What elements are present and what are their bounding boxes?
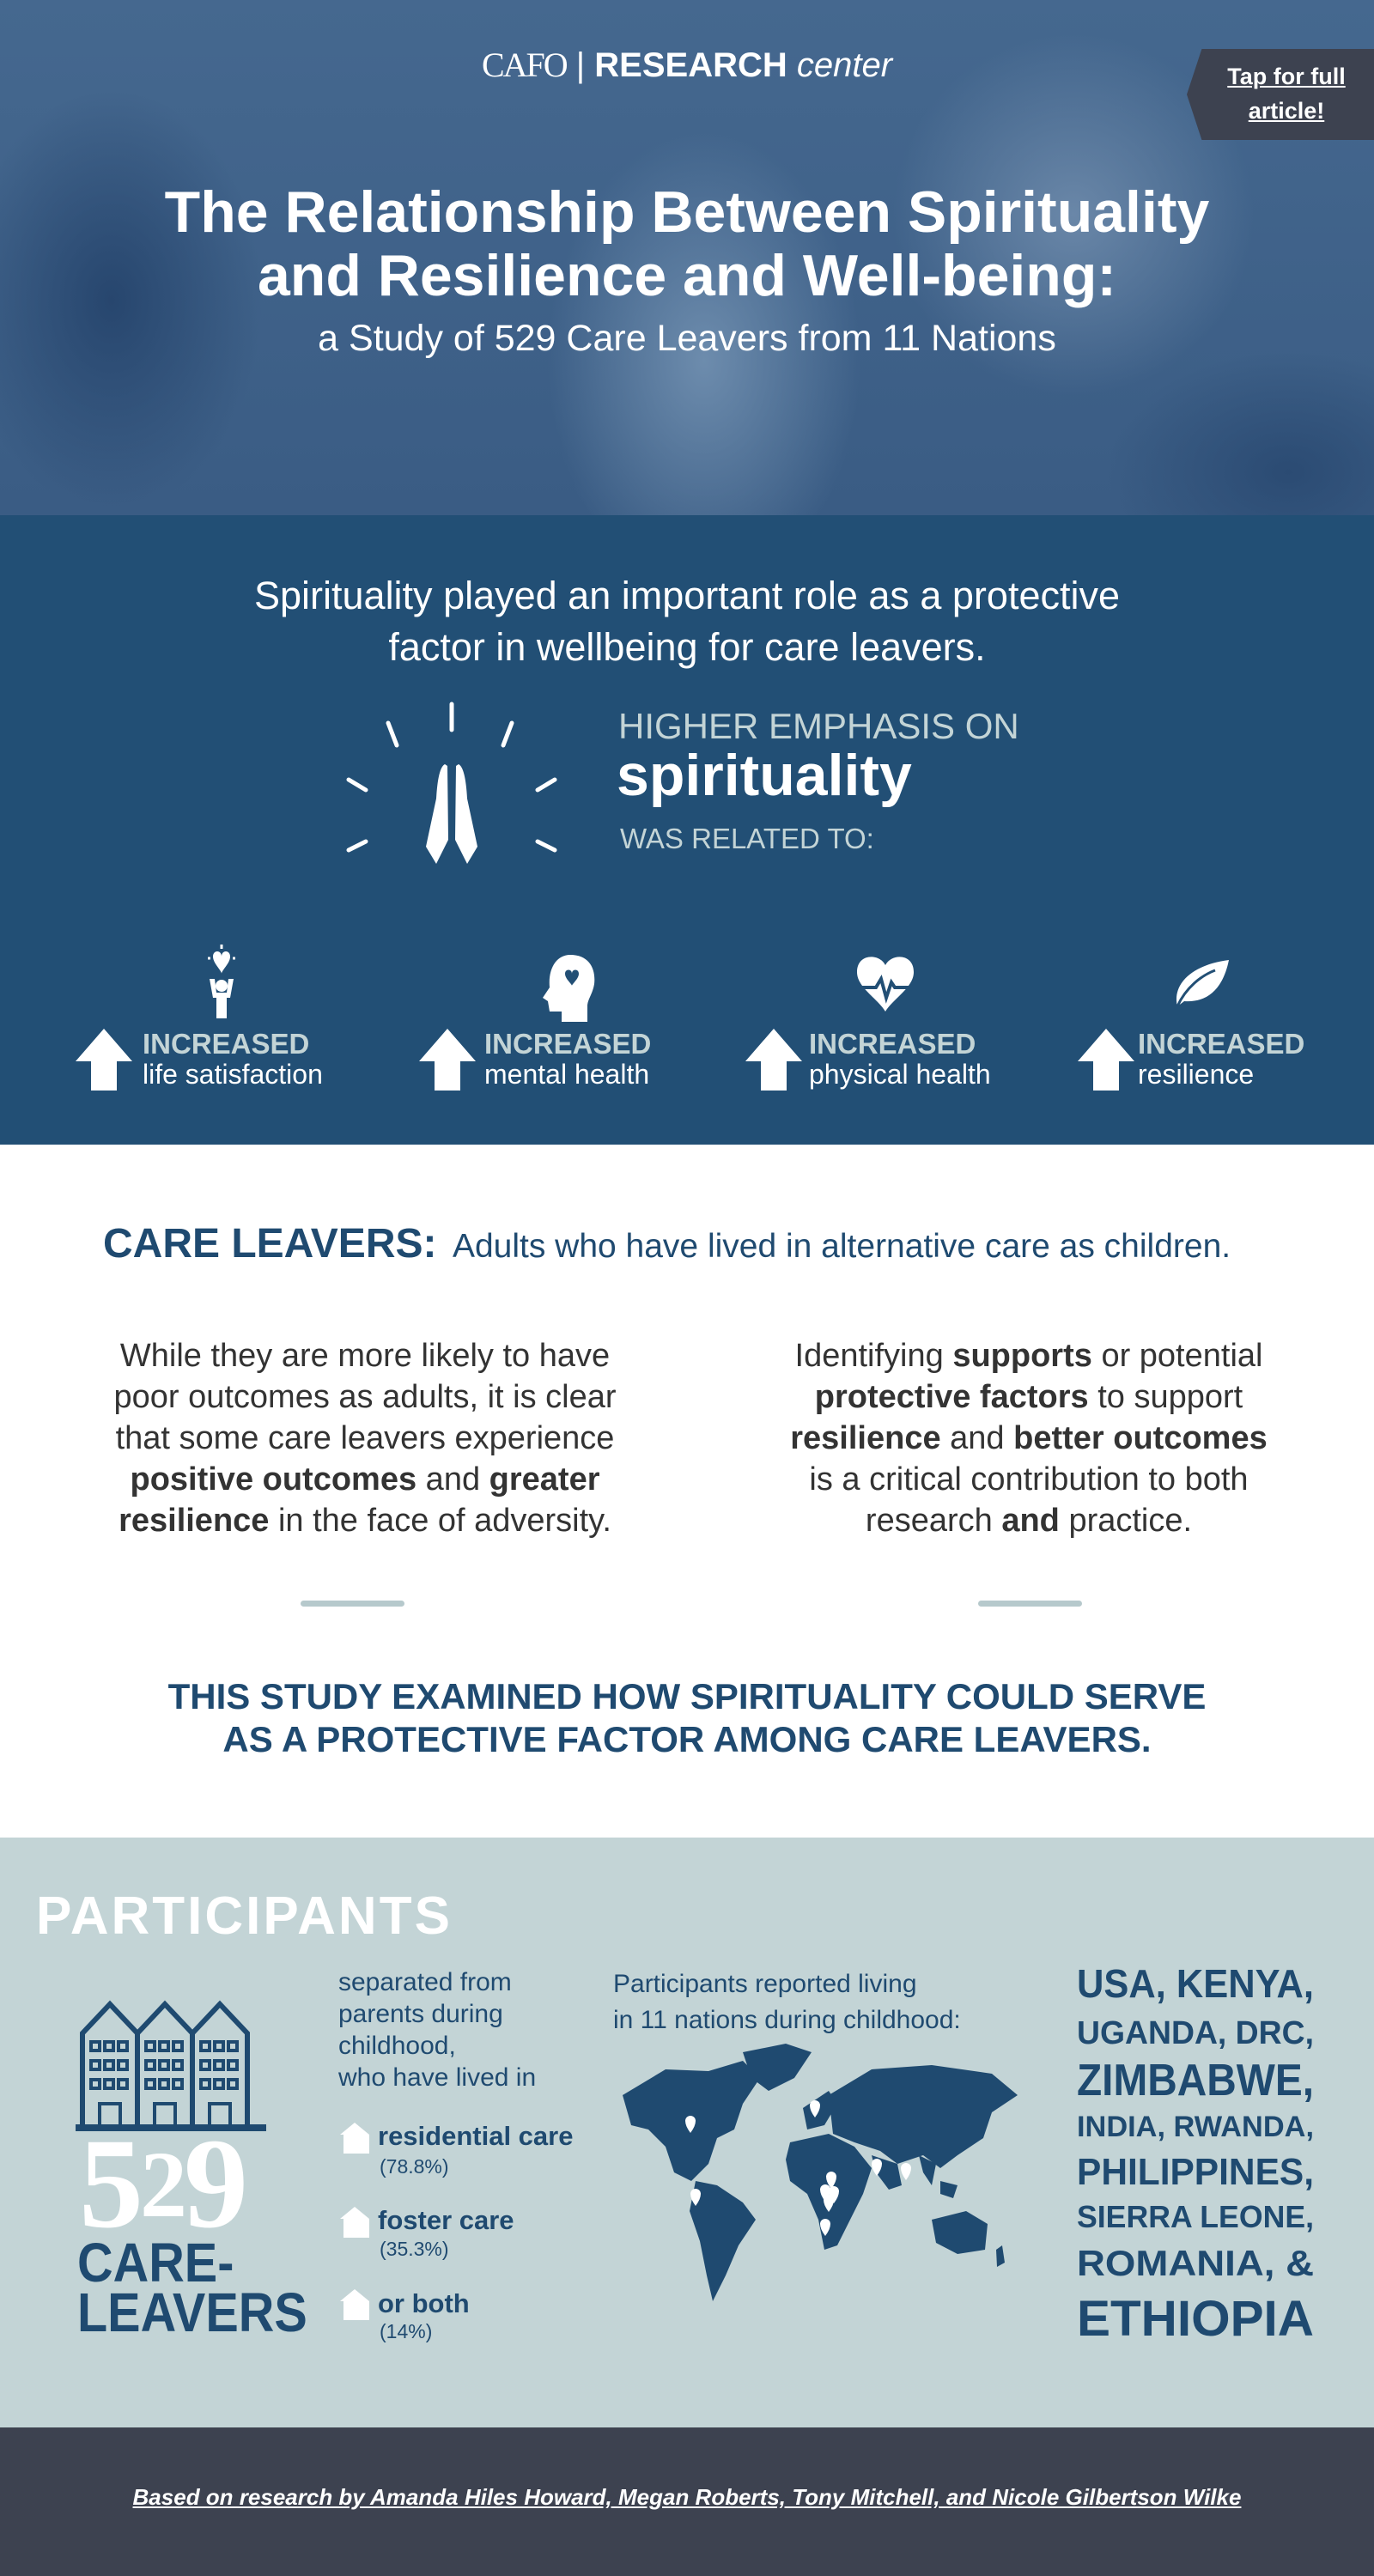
country list: USA, KENYA, xyxy=(1077,1961,1314,2006)
item: resilience: INCREASED xyxy=(1138,1028,1304,1060)
logo: CAFO | RESEARCH center xyxy=(482,46,892,84)
country list: UGANDA, DRC, xyxy=(1077,2015,1314,2051)
care type list: residential care xyxy=(378,2121,573,2151)
care type text: childhood, xyxy=(338,2032,456,2060)
item: life satisfaction: life satisfaction xyxy=(143,1059,323,1090)
right paragraph: research and practice. xyxy=(866,1503,1192,1539)
care-leavers label xyxy=(77,2232,307,2343)
care type list: foster care xyxy=(378,2205,514,2235)
care-leavers label: LEAVERS xyxy=(77,2281,307,2343)
button: tap for full article: article! xyxy=(1249,98,1324,124)
care-leavers label: CARE- xyxy=(77,2232,234,2293)
footer credits xyxy=(0,2427,1374,2576)
panel: spirituality findings xyxy=(0,515,1374,1145)
country list: PHILIPPINES, xyxy=(1077,2151,1314,2193)
right paragraph xyxy=(790,1338,1268,1539)
care type list: (78.8%) xyxy=(380,2155,449,2178)
panel: participants xyxy=(0,1838,1374,2427)
world map xyxy=(623,2044,1018,2301)
country list: ROMANIA, & xyxy=(1077,2243,1314,2283)
study statement: AS A PROTECTIVE FACTOR AMONG CARE LEAVERS. xyxy=(222,1719,1152,1759)
care type list: or both xyxy=(378,2288,470,2318)
care type text: parents during xyxy=(338,2000,503,2028)
right paragraph: is a critical contribution to both xyxy=(809,1461,1249,1498)
right paragraph: protective factors to support xyxy=(815,1379,1243,1415)
item: resilience: resilience xyxy=(1138,1059,1254,1090)
left paragraph: While they are more likely to have xyxy=(120,1338,610,1374)
country list xyxy=(1077,1961,1314,2347)
item: mental health xyxy=(419,955,651,1091)
item: physical health xyxy=(745,957,991,1091)
map caption xyxy=(613,1970,961,2034)
right paragraph: Identifying supports or potential xyxy=(795,1338,1262,1374)
arrow xyxy=(419,1029,476,1091)
country list: ZIMBABWE, xyxy=(1077,2056,1314,2105)
care type text: separated from xyxy=(338,1968,512,1996)
map caption: Participants reported living xyxy=(613,1970,917,1998)
panel: care leavers definition xyxy=(0,1145,1374,1838)
panel: spirituality findings: WAS RELATED TO: xyxy=(620,823,874,854)
number 529: 529 xyxy=(79,2112,245,2255)
title xyxy=(165,179,1209,308)
intro text: Spirituality played an important role as a protective xyxy=(254,574,1120,617)
care type list: (14%) xyxy=(380,2320,432,2342)
left paragraph: resilience in the face of adversity. xyxy=(119,1503,611,1539)
care type text: who have lived in xyxy=(338,2063,536,2092)
item: mental health: mental health xyxy=(484,1059,649,1090)
item: mental health: INCREASED xyxy=(484,1028,651,1060)
header photo panel xyxy=(0,0,1374,515)
item: life satisfaction: INCREASED xyxy=(143,1028,309,1060)
icon: praying hands xyxy=(347,702,556,864)
item: physical health: INCREASED xyxy=(809,1028,976,1060)
care type text xyxy=(338,1968,536,2092)
emphasis text: HIGHER EMPHASIS ON xyxy=(618,706,1019,746)
left paragraph: positive outcomes and greater xyxy=(130,1461,599,1498)
arrow xyxy=(76,1029,132,1091)
subtitle: a Study of 529 Care Leavers from 11 Nations xyxy=(318,318,1056,359)
button: tap for full article xyxy=(1187,49,1374,140)
right paragraph: resilience and better outcomes xyxy=(790,1420,1268,1456)
country list: SIERRA LEONE, xyxy=(1077,2199,1314,2234)
icon: buildings xyxy=(76,2001,266,2131)
study statement xyxy=(168,1676,1206,1759)
map caption: in 11 nations during childhood: xyxy=(613,2006,961,2034)
button: tap for full article: Tap for full xyxy=(1227,64,1346,89)
intro text: factor in wellbeing for care leavers. xyxy=(388,625,986,669)
left paragraph: that some care leavers experience xyxy=(116,1420,614,1456)
arrow xyxy=(745,1029,802,1091)
care type list: (35.3%) xyxy=(380,2238,449,2260)
intro text xyxy=(254,574,1120,669)
definition heading: CARE LEAVERS: Adults who have lived in alternative care as children. xyxy=(103,1221,1231,1267)
care type list xyxy=(340,2121,573,2342)
title: and Resilience and Well-being: xyxy=(258,243,1116,308)
item: resilience xyxy=(1078,960,1304,1091)
item: life satisfaction xyxy=(76,945,323,1091)
left paragraph: poor outcomes as adults, it is clear xyxy=(113,1379,617,1415)
heading: PARTICIPANTS xyxy=(36,1886,453,1946)
country list: INDIA, RWANDA, xyxy=(1077,2111,1314,2143)
left paragraph xyxy=(113,1338,617,1539)
footer credits: Based on research by Amanda Hiles Howard, Megan Roberts, Tony Mitchell, and Nicole Gilbertson Wilke xyxy=(133,2484,1241,2510)
item: physical health: physical health xyxy=(809,1059,991,1090)
study statement: THIS STUDY EXAMINED HOW SPIRITUALITY COULD SERVE xyxy=(168,1676,1206,1716)
arrow xyxy=(1078,1029,1134,1091)
title: The Relationship Between Spirituality xyxy=(165,179,1209,245)
country list: ETHIOPIA xyxy=(1077,2291,1314,2347)
panel: spirituality findings: spirituality xyxy=(617,743,912,808)
